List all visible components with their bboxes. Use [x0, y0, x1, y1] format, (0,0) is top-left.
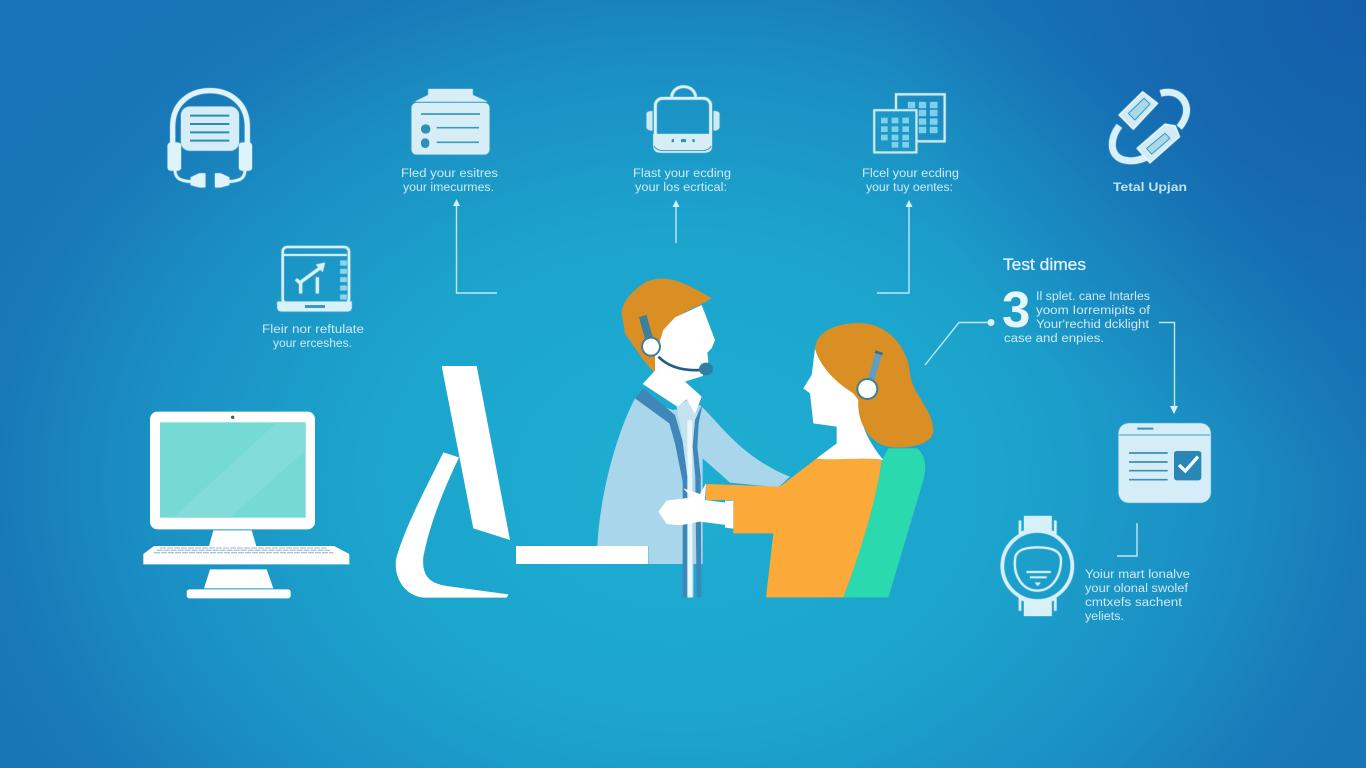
icon: smart watch: [1002, 516, 1072, 616]
caption: tablet: your los ecrtical:: [635, 182, 727, 194]
callout heading: Test dimes: [1003, 256, 1086, 274]
caption: archive: your imecurmes.: [403, 182, 494, 194]
caption: laptop: your erceshes.: [273, 338, 352, 350]
arrow: to tablet: [672, 200, 680, 243]
caption: archive: [401, 168, 498, 194]
arrow: to grids: [877, 200, 912, 293]
icon: overlapping grids: [874, 94, 945, 152]
connector: checklist to watch: [1117, 523, 1137, 556]
arrow: callout leader: [925, 319, 994, 365]
chair: [843, 448, 925, 597]
callout number: 3: [1002, 281, 1030, 338]
icon: laptop chart: [277, 247, 352, 311]
caption: grids: Flcel your ecding: [862, 168, 959, 180]
woman with headset: [658, 323, 933, 597]
desk: [516, 546, 648, 564]
man with headset: [597, 279, 790, 597]
callout text: [1004, 291, 1151, 345]
icon: archive box: [412, 89, 489, 154]
icon: link connector: [1112, 92, 1187, 163]
caption: archive: Fled your esitres: [401, 168, 498, 180]
caption: grids: [862, 168, 959, 194]
caption: watch: yeliets.: [1085, 611, 1124, 623]
caption: watch: cmtxefs sachent: [1085, 597, 1183, 609]
icon: tablet device: [647, 87, 719, 153]
caption: laptop: Fleir nor reftulate: [262, 324, 364, 336]
icon: headphones: [168, 91, 252, 187]
callout text: case and enpies.: [1004, 333, 1104, 345]
callout text: yoom Iorremipits of: [1036, 305, 1151, 317]
arrow: to archive: [453, 199, 497, 293]
side-view monitor: [396, 366, 510, 598]
callout text: Il splet. cane Intarles: [1036, 291, 1150, 303]
caption: watch: Yoiur mart lonalve: [1085, 569, 1190, 581]
caption: watch: [1085, 569, 1190, 623]
caption: watch: your olonal swolef: [1085, 583, 1189, 595]
desktop computer: [143, 412, 349, 598]
caption: grids: your tuy oentes:: [866, 182, 953, 194]
icon: checklist window: [1119, 423, 1211, 503]
caption: laptop: [262, 324, 364, 350]
caption: link: Tetal Upjan: [1113, 180, 1187, 194]
callout text: Your'rechid dcklight: [1036, 319, 1150, 331]
caption: tablet: Flast your ecding: [633, 168, 731, 180]
caption: tablet: [633, 168, 731, 194]
arrow: callout to checklist: [1159, 322, 1178, 414]
